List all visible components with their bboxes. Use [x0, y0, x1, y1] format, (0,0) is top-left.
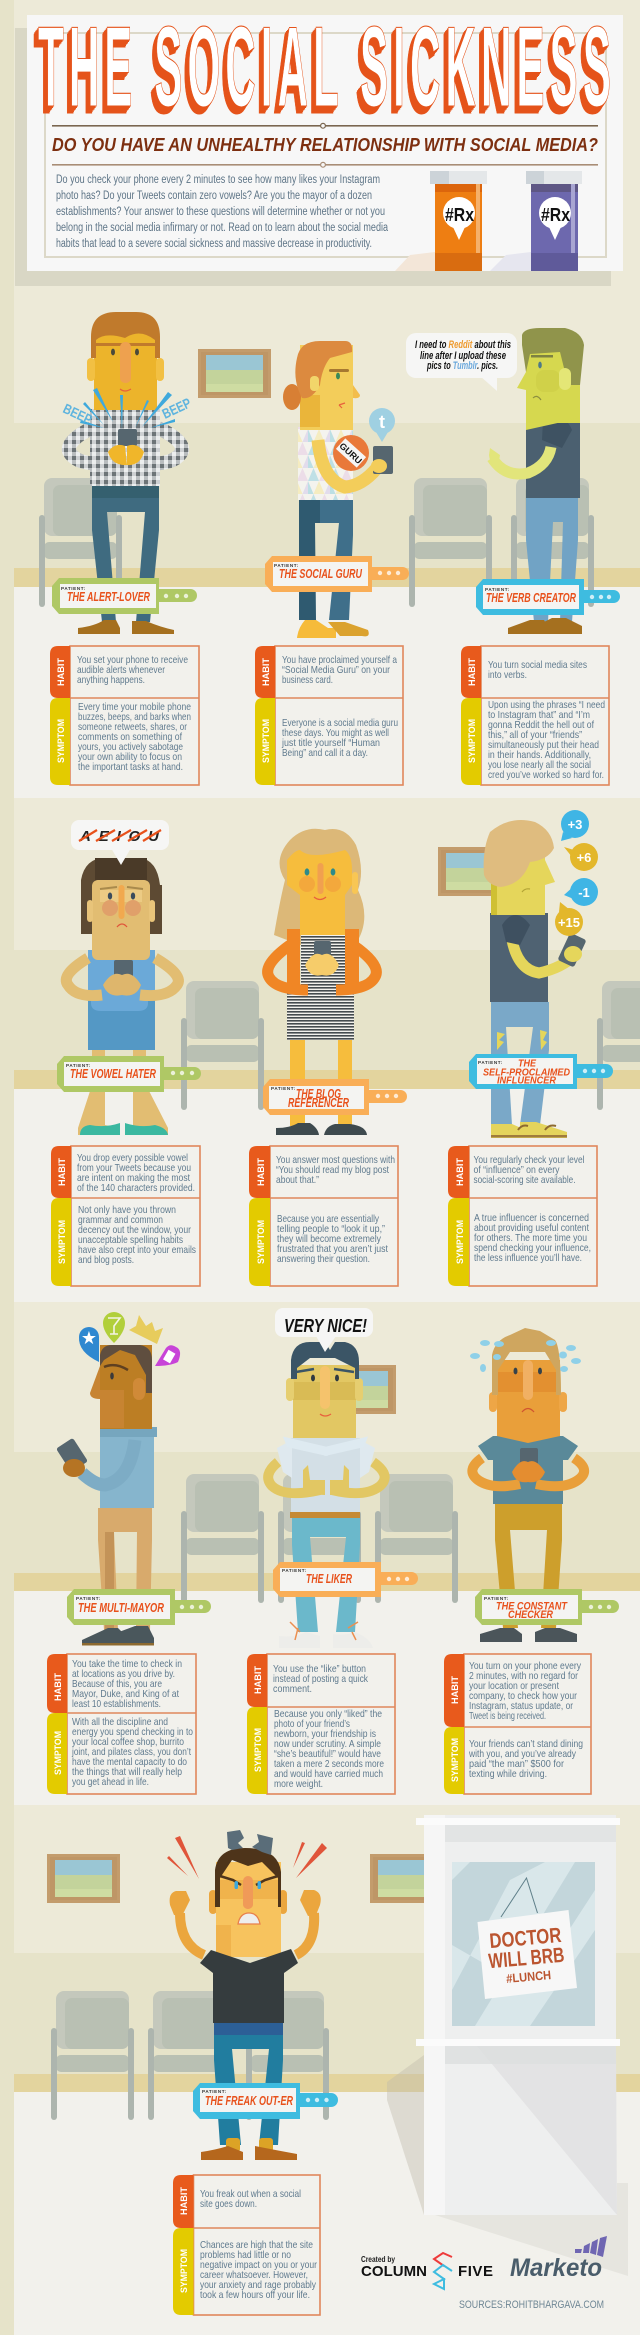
patient band: the alert-lover: PATIENT:	[61, 586, 86, 591]
card: multi-mayor habit and symptom: Mayor, Duke, and King of at	[72, 1688, 179, 1700]
card: blog referencer habit and symptom: Because you are essentially	[277, 1213, 380, 1225]
icon: purple pill bottle: #Rx	[541, 205, 570, 225]
card: influencer habit and symptom: of “influence” on every	[474, 1164, 560, 1176]
patient band: the liker	[273, 1562, 418, 1597]
card: vowel hater habit and symptom: You drop every possible vowel	[77, 1152, 188, 1164]
card: freak out-er habit and symptom: You freak out when a social	[200, 2188, 301, 2200]
card: multi-mayor habit and symptom: joint, and pilates class, you don’t	[71, 1746, 191, 1758]
card: alert-lover habit and symptom	[50, 646, 199, 785]
card: freak out-er habit and symptom: site goes down.	[200, 2198, 257, 2210]
card: alert-lover habit and symptom: comments on something of	[78, 731, 182, 743]
card: alert-lover habit and symptom: Every time your mobile phone	[78, 701, 191, 713]
speech bubble: struck out vowels	[71, 820, 169, 865]
icon: score bubbles: +3	[568, 817, 582, 832]
patient band: the multi-mayor	[67, 1589, 211, 1625]
card: vowel hater habit and symptom	[51, 1146, 200, 1286]
card: social guru habit and symptom: SYMPTOM	[261, 719, 272, 763]
logo: created by column five: FIVE	[458, 2263, 493, 2280]
sign: doctor will brb	[478, 1878, 577, 1999]
card: liker habit and symptom: more weight.	[274, 1778, 323, 1790]
icon: score bubbles: +15	[558, 915, 580, 930]
card: liker habit and symptom: HABIT	[253, 1666, 264, 1694]
icon: tumblr bubble	[369, 408, 395, 442]
patient band: the alert-lover	[52, 578, 197, 614]
character: the self-proclaimed influencer	[484, 810, 598, 1138]
speech bubble: very nice	[275, 1308, 373, 1352]
card: multi-mayor habit and symptom: energy you spend checking in to	[72, 1726, 193, 1738]
card: constant checker habit and symptom: texting while driving.	[469, 1768, 547, 1780]
patient band: the freak out-er: PATIENT:	[202, 2089, 227, 2094]
character: the alert-lover	[61, 312, 193, 634]
speech bubble: very nice: VERY NICE!	[284, 1316, 367, 1336]
card: alert-lover habit and symptom: someone retweets, shares, or	[78, 721, 187, 733]
card: constant checker habit and symptom: with you, and you’ve already	[468, 1748, 577, 1760]
decorative room furniture, row one	[39, 349, 594, 607]
icon: location badges	[79, 1312, 180, 1366]
card: liker habit and symptom: now under scrutiny. A simple	[274, 1738, 381, 1750]
icon: score bubbles: +6	[577, 850, 591, 865]
card: liker habit and symptom: comment.	[273, 1683, 312, 1695]
patient band: the blog referencer: THE BLOG	[296, 1087, 341, 1101]
card: constant checker habit and symptom: company, to check how your	[469, 1690, 577, 1702]
card: freak out-er habit and symptom: SYMPTOM	[179, 2249, 190, 2293]
icon: score bubbles: -1	[578, 885, 590, 900]
card: influencer habit and symptom: SYMPTOM	[455, 1220, 466, 1264]
card: alert-lover habit and symptom: the important tasks at hand.	[78, 761, 183, 773]
icon: purple pill bottle	[490, 171, 582, 271]
card: alert-lover habit and symptom: your own ability to focus on	[78, 751, 182, 763]
decorative room furniture, row three	[181, 1365, 458, 1603]
card: freak out-er habit and symptom: career whatsoever. However,	[200, 2269, 308, 2281]
card: verb creator habit and symptom: You turn social media sites	[488, 659, 587, 671]
card: multi-mayor habit and symptom: Because of this, you are	[72, 1678, 162, 1690]
card: freak out-er habit and symptom: HABIT	[179, 2187, 190, 2215]
icon: beep rays	[80, 388, 175, 430]
speech bubble: reddit line	[406, 333, 517, 391]
patient band: the self-proclaimed influencer: INFLUENCER	[497, 1074, 556, 1086]
card: social guru habit and symptom: Everyone is a social media guru	[282, 717, 398, 729]
card: social guru habit and symptom	[255, 646, 403, 785]
decorative room furniture, row four	[47, 1854, 443, 2120]
kick plate	[416, 2039, 620, 2215]
patient band: the verb creator: PATIENT:	[485, 587, 510, 592]
speech bubble: reddit line: pics to Tumblr. pics.	[426, 360, 498, 372]
card: blog referencer habit and symptom: frustrated that you aren’t just	[277, 1243, 388, 1255]
card: alert-lover habit and symptom: yours, you actively sabotage	[78, 741, 183, 753]
character: the liker	[268, 1342, 385, 1648]
character: the blog referencer	[268, 829, 376, 1135]
patient band: the social guru: PATIENT:	[274, 563, 299, 568]
card: constant checker habit and symptom: You turn on your phone every	[469, 1660, 582, 1672]
patient band: the blog referencer	[263, 1079, 407, 1115]
patient band: the self-proclaimed influencer	[469, 1054, 613, 1089]
icon: location badges: ★	[81, 1328, 97, 1348]
card: alert-lover habit and symptom: You set your phone to receive	[77, 654, 188, 666]
doctor's door	[387, 1815, 628, 2276]
character: the freak out-er	[167, 1830, 327, 2160]
intro text	[56, 174, 388, 250]
card: alert-lover habit and symptom: audible alerts whenever	[77, 664, 165, 676]
card: influencer habit and symptom: for others. The more time you	[474, 1232, 587, 1244]
beep labels: BEEP	[160, 395, 193, 422]
intro text: Do you check your phone every 2 minutes to see how many likes your Instagram	[56, 174, 380, 186]
intro text: belong in the social media infirmary or not. Read on to learn about the social media	[56, 222, 388, 234]
character: the verb creator	[489, 328, 584, 634]
card: multi-mayor habit and symptom: SYMPTOM	[53, 1731, 64, 1775]
speech bubble: struck out vowels: AEIOU	[79, 828, 160, 845]
beep labels	[61, 395, 193, 427]
card: vowel hater habit and symptom: Not only have you thrown	[78, 1204, 176, 1216]
door window	[452, 1862, 595, 2026]
card: liker habit and symptom: Because you only “liked” the	[274, 1708, 382, 1720]
character: the social guru	[283, 341, 395, 638]
card: vowel hater habit and symptom: are intent on making the most	[77, 1172, 190, 1184]
patient band: the self-proclaimed influencer: THE	[518, 1058, 536, 1070]
card: freak out-er habit and symptom: Chances are high that the site	[200, 2239, 313, 2251]
card: blog referencer habit and symptom: about that.”	[276, 1174, 319, 1186]
card: constant checker habit and symptom: 2 minutes, with no regard for	[469, 1670, 578, 1682]
card: vowel hater habit and symptom: HABIT	[57, 1158, 68, 1186]
icon: anger marks	[167, 1836, 327, 1879]
card: blog referencer habit and symptom: HABIT	[256, 1158, 267, 1186]
card: social guru habit and symptom: business card.	[282, 674, 333, 686]
card: influencer habit and symptom: You regularly check your level	[474, 1154, 584, 1166]
card: multi-mayor habit and symptom: HABIT	[53, 1673, 64, 1701]
card: vowel hater habit and symptom: from your Tweets because you	[77, 1162, 191, 1174]
patient band: the self-proclaimed influencer: SELF-PROCLAIMED	[483, 1066, 570, 1078]
patient band: the constant checker: CHECKER	[508, 1609, 553, 1621]
sign: doctor will brb: WILL BRB	[488, 1944, 565, 1973]
card: constant checker habit and symptom: SYMPTOM	[450, 1738, 461, 1782]
card: constant checker habit and symptom	[444, 1654, 591, 1794]
sign: doctor will brb: DOCTOR	[489, 1924, 562, 1953]
card: liker habit and symptom: “she’s beautiful!” would have	[274, 1748, 381, 1760]
patient band: the multi-mayor: PATIENT:	[76, 1596, 101, 1601]
patient band: the blog referencer: PATIENT:	[271, 1086, 296, 1091]
card: verb creator habit and symptom: into verbs.	[488, 669, 527, 681]
icon: orange pill bottle	[395, 171, 487, 271]
icon: tumblr bubble: t	[379, 412, 385, 432]
logo: created by column five: Created by	[361, 2255, 395, 2264]
card: liker habit and symptom: newborn, your friendship is	[274, 1728, 376, 1740]
card: multi-mayor habit and symptom: you get ahead in life.	[72, 1776, 149, 1788]
patient band: the vowel hater: PATIENT:	[66, 1063, 91, 1068]
intro text: establishments? Your answer to these questions will determine whether or not you	[56, 206, 385, 218]
card: vowel hater habit and symptom: decency out the window, your	[78, 1224, 191, 1236]
card: influencer habit and symptom: social-scoring site available.	[474, 1174, 576, 1186]
card: blog referencer habit and symptom: “You should read my blog post	[276, 1164, 389, 1176]
card: constant checker habit and symptom: Instagram, status update, or	[469, 1700, 573, 1712]
card: liker habit and symptom: SYMPTOM	[253, 1728, 264, 1772]
card: verb creator habit and symptom: Upon using the phrases “I need	[488, 699, 605, 711]
card: alert-lover habit and symptom: HABIT	[56, 658, 67, 686]
card: social guru habit and symptom: Being” and call it a day.	[282, 747, 368, 759]
sources line: SOURCES:ROHITBHARGAVA.COM	[459, 2299, 604, 2311]
divider top	[52, 123, 598, 128]
card: verb creator habit and symptom: this,” all of your “friends”	[488, 729, 582, 741]
card: liker habit and symptom: instead of posting a quick	[273, 1673, 369, 1685]
card: blog referencer habit and symptom: answering their question.	[277, 1253, 370, 1265]
card: influencer habit and symptom: the less influence you’ll have.	[474, 1252, 582, 1264]
card: constant checker habit and symptom: Your friends can’t stand dining	[469, 1738, 583, 1750]
card: influencer habit and symptom: A true influencer is concerned	[474, 1212, 589, 1224]
card: multi-mayor habit and symptom: With all the discipline and	[72, 1716, 168, 1728]
card: multi-mayor habit and symptom: the things that will really help	[72, 1766, 182, 1778]
card: social guru habit and symptom: HABIT	[261, 658, 272, 686]
logo: marketo: Marketo	[510, 2254, 602, 2282]
card: freak out-er habit and symptom: your anxiety and rage probably	[200, 2279, 317, 2291]
patient band: the freak out-er	[193, 2083, 338, 2119]
header panel	[15, 4, 623, 286]
card: multi-mayor habit and symptom: You take the time to check in	[72, 1658, 182, 1670]
icon: guru badge: GURU	[337, 441, 364, 466]
card: multi-mayor habit and symptom	[47, 1654, 196, 1794]
speech bubble: reddit line: line after I upload these	[420, 350, 506, 362]
card: verb creator habit and symptom	[461, 646, 609, 785]
icon: sweat drops	[470, 1340, 581, 1372]
logo: created by column five: COLUMN	[361, 2263, 427, 2280]
patient band: the self-proclaimed influencer: PATIENT:	[478, 1060, 503, 1065]
card: social guru habit and symptom: “Social Media Guru” on your	[282, 664, 390, 676]
card: liker habit and symptom: and would have carried much	[274, 1768, 383, 1780]
card: liker habit and symptom	[247, 1654, 395, 1794]
card: constant checker habit and symptom: paid “the man” $500 for	[469, 1758, 564, 1770]
divider bottom	[52, 162, 598, 167]
intro text: habits that lead to a severe social sickness and massive decrease in productivity.	[56, 238, 372, 250]
card: social guru habit and symptom: these days. You might as well	[282, 727, 389, 739]
card: influencer habit and symptom: HABIT	[455, 1158, 466, 1186]
card: influencer habit and symptom	[448, 1146, 597, 1286]
patient band: the social guru	[265, 556, 409, 592]
icon: guru badge	[333, 435, 369, 471]
card: vowel hater habit and symptom: of the 140 characters provided.	[77, 1182, 195, 1194]
patient band: the multi-mayor: THE MULTI-MAYOR	[78, 1601, 164, 1615]
decorative room furniture, row two	[181, 847, 640, 1110]
card: freak out-er habit and symptom	[173, 2175, 320, 2315]
card: verb creator habit and symptom: simultaneously put their head	[488, 739, 599, 751]
card: constant checker habit and symptom: HABIT	[450, 1676, 461, 1704]
character: the multi-mayor	[56, 1312, 180, 1646]
patient band: the constant checker	[475, 1589, 619, 1625]
card: verb creator habit and symptom: HABIT	[467, 658, 478, 686]
patient band: the vowel hater: THE VOWEL HATER	[70, 1067, 156, 1081]
card: liker habit and symptom: photo of your friend’s	[274, 1718, 350, 1730]
patient band: the liker: PATIENT:	[282, 1568, 307, 1573]
speech bubble: reddit line: I need to Reddit about this	[415, 339, 511, 351]
card: multi-mayor habit and symptom: your local coffee shop, burrito	[72, 1736, 184, 1748]
patient band: the social guru: THE SOCIAL GURU	[279, 567, 363, 581]
card: blog referencer habit and symptom: SYMPTOM	[256, 1220, 267, 1264]
card: alert-lover habit and symptom: buzzes, beeps, and barks when	[78, 711, 191, 723]
card: vowel hater habit and symptom: unacceptable spelling habits	[78, 1234, 183, 1246]
card: vowel hater habit and symptom: have also crept into your emails	[78, 1244, 196, 1256]
character: the vowel hater	[66, 858, 178, 1135]
logo: created by column five	[361, 2253, 493, 2289]
card: freak out-er habit and symptom: problems had little or no	[200, 2249, 291, 2261]
beep labels: BEEP	[61, 400, 95, 427]
card: constant checker habit and symptom: your location or present	[469, 1680, 559, 1692]
icon: broken phone	[227, 1830, 273, 1855]
card: verb creator habit and symptom: gonna Reddit the hell out of	[488, 719, 594, 731]
card: multi-mayor habit and symptom: have the mental capacity to do	[72, 1756, 187, 1768]
card: verb creator habit and symptom: you lose nearly all the social	[488, 759, 591, 771]
card: verb creator habit and symptom: SYMPTOM	[467, 719, 478, 763]
card: blog referencer habit and symptom: telling people to “look it up,”	[277, 1223, 385, 1235]
subtitle: DO YOU HAVE AN UNHEALTHY RELATIONSHIP WITH SOCIAL MEDIA?	[52, 135, 598, 155]
card: alert-lover habit and symptom: anything happens.	[77, 674, 145, 686]
card: blog referencer habit and symptom: they will become extremely	[277, 1233, 382, 1245]
sign: doctor will brb: #LUNCH	[506, 1968, 552, 1986]
card: verb creator habit and symptom: to Instagram that” and “I’m	[488, 709, 590, 721]
card: multi-mayor habit and symptom: least 10 establishments.	[72, 1698, 161, 1710]
card: blog referencer habit and symptom: You answer most questions with	[276, 1154, 395, 1166]
card: vowel hater habit and symptom: SYMPTOM	[57, 1220, 68, 1264]
card: blog referencer habit and symptom	[249, 1146, 398, 1286]
patient band: the verb creator	[476, 579, 620, 615]
patient band: the verb creator: THE VERB CREATOR	[486, 591, 576, 605]
card: liker habit and symptom: taken a mere 2 seconds more	[274, 1758, 384, 1770]
intro text: photo has? Do your Tweets contain zero vowels? Are you the mayor of a dozen	[56, 190, 372, 202]
patient band: the constant checker: PATIENT:	[484, 1596, 509, 1601]
patient band: the freak out-er: THE FREAK OUT-ER	[205, 2094, 293, 2108]
patient band: the blog referencer: REFERENCER	[288, 1096, 349, 1110]
card: freak out-er habit and symptom: negative impact on you or your	[200, 2259, 317, 2271]
card: influencer habit and symptom: about providing useful content	[474, 1222, 589, 1234]
card: verb creator habit and symptom: in their hands. Additionally,	[488, 749, 591, 761]
card: vowel hater habit and symptom: grammar and common	[78, 1214, 163, 1226]
patient band: the vowel hater	[57, 1056, 201, 1092]
icon: score bubbles	[555, 810, 598, 936]
card: freak out-er habit and symptom: took a few hours off your life.	[200, 2289, 310, 2301]
card: social guru habit and symptom: You have proclaimed yourself a	[282, 654, 397, 666]
patient band: the constant checker: THE CONSTANT	[496, 1600, 568, 1612]
card: alert-lover habit and symptom: SYMPTOM	[56, 719, 67, 763]
patient band: the alert-lover: THE ALERT-LOVER	[67, 590, 150, 604]
card: multi-mayor habit and symptom: at locations as you drive by.	[72, 1668, 175, 1680]
card: constant checker habit and symptom: Tweet is being received.	[469, 1710, 546, 1722]
logo: marketo	[510, 2236, 607, 2282]
card: liker habit and symptom: You use the “like” button	[273, 1663, 366, 1675]
patient band: the liker: THE LIKER	[306, 1572, 352, 1586]
character: the constant checker	[470, 1328, 584, 1642]
card: verb creator habit and symptom: cred you’ve worked so hard for.	[488, 769, 604, 781]
card: influencer habit and symptom: spend checking your influence,	[474, 1242, 591, 1254]
icon: orange pill bottle: #Rx	[445, 205, 474, 225]
card: vowel hater habit and symptom: and blog posts.	[78, 1254, 134, 1266]
card: social guru habit and symptom: just title yourself “Human	[281, 737, 380, 749]
